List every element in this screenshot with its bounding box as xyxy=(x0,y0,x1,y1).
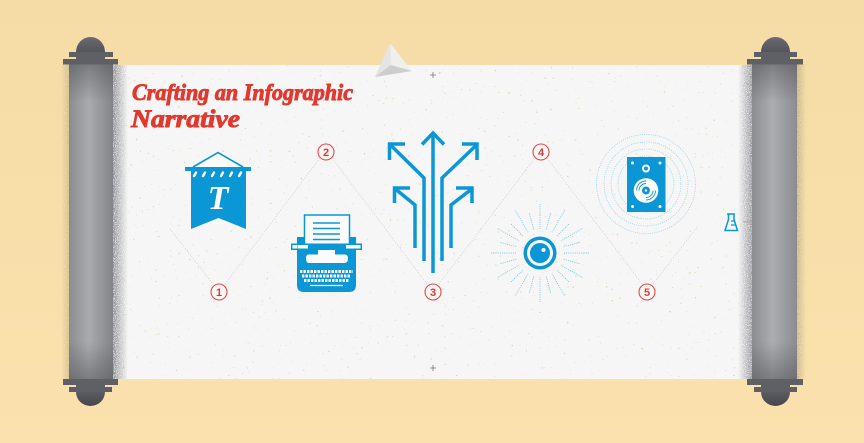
step number 5: 5 xyxy=(644,287,650,299)
registration mark: top xyxy=(430,72,436,78)
step number 4: 4 xyxy=(538,147,545,159)
step number 3: 3 xyxy=(430,287,436,299)
icon: eye with rays xyxy=(491,204,589,302)
icon: speaker with sound rings xyxy=(596,134,696,234)
icon: typewriter xyxy=(291,215,362,292)
title xyxy=(130,80,353,133)
icon: banner xyxy=(185,152,251,229)
left roller xyxy=(61,37,118,406)
dotted path connecting the steps xyxy=(170,158,698,284)
step number 2 xyxy=(318,144,334,160)
right roller xyxy=(747,37,806,406)
step number 2: 2 xyxy=(323,147,329,159)
icon: flask xyxy=(725,214,738,230)
panel: paper sheet xyxy=(113,65,753,379)
icon: paper pyramid pin xyxy=(375,43,412,77)
registration mark: bottom xyxy=(430,365,436,371)
icon: branching arrows xyxy=(390,133,477,273)
step number 4 xyxy=(533,144,549,160)
step number 3 xyxy=(425,284,441,300)
title: Crafting an Infographic xyxy=(132,80,353,105)
step number 5 xyxy=(639,284,655,300)
title: Narrative xyxy=(130,106,240,133)
tick beside flask xyxy=(743,221,752,223)
icon: banner: T xyxy=(208,180,230,217)
step number 1 xyxy=(211,284,227,300)
step number 1: 1 xyxy=(216,287,222,299)
